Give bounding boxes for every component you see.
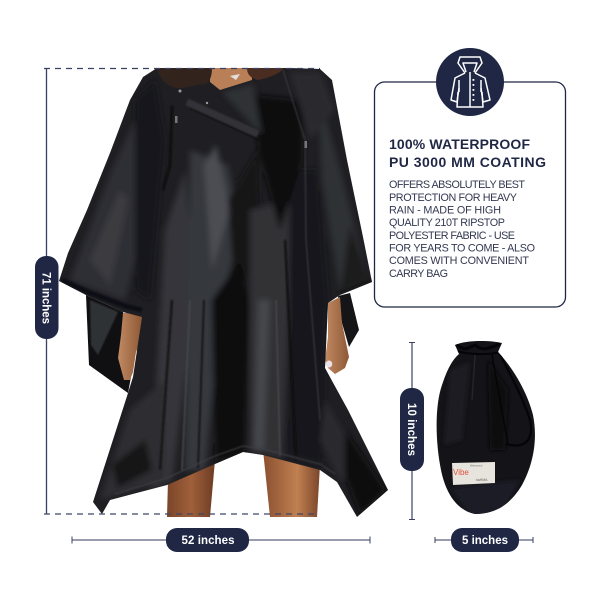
bag label: Waterproof [470, 464, 483, 468]
card heading: PU 3000 MM COATING [389, 154, 546, 170]
card body text: RAIN - MADE OF HIGH [389, 204, 501, 216]
dimension: bag height 10 inches: 10 inches [405, 403, 417, 456]
right hanging panel [338, 293, 359, 347]
card body text: QUALITY 210T RIPSTOP [389, 217, 505, 229]
card body text: PROTECTION FOR HEAVY [389, 192, 517, 204]
poncho photo [50, 60, 395, 525]
feature card [374, 48, 566, 307]
dimension: width 52 inches [72, 528, 370, 552]
icon: jacket badge [436, 48, 504, 116]
card body text: COMES WITH CONVENIENT [389, 255, 529, 267]
card body text [389, 179, 535, 280]
dimension: height 71 inches: 71 inches [40, 272, 52, 324]
bag label: Vibe [453, 468, 469, 477]
card body text: CARRY BAG [389, 268, 448, 280]
bag label [452, 462, 495, 485]
poncho body [50, 60, 395, 525]
dimension: bag width 5 inches [435, 528, 533, 552]
carry bag [437, 341, 535, 515]
dimension: width 52 inches: 52 inches [182, 535, 234, 547]
card body text: FOR YEARS TO COME - ALSO [389, 242, 535, 254]
legs [167, 450, 320, 517]
dimension: height 71 inches [35, 68, 320, 514]
left hand [118, 313, 142, 380]
card body text: OFFERS ABSOLUTELY BEST [389, 179, 525, 191]
right hand [325, 297, 349, 374]
dimension: bag height 10 inches [400, 342, 424, 520]
bag label: swftMA [476, 478, 488, 482]
left hanging panel [86, 295, 136, 393]
card body text: POLYESTER FABRIC - USE [389, 230, 515, 242]
card heading: 100% WATERPROOF [389, 136, 530, 152]
card heading [389, 136, 546, 170]
hair and neck [157, 68, 284, 90]
dimension: bag width 5 inches: 5 inches [462, 535, 508, 547]
cord toggles [175, 90, 307, 148]
